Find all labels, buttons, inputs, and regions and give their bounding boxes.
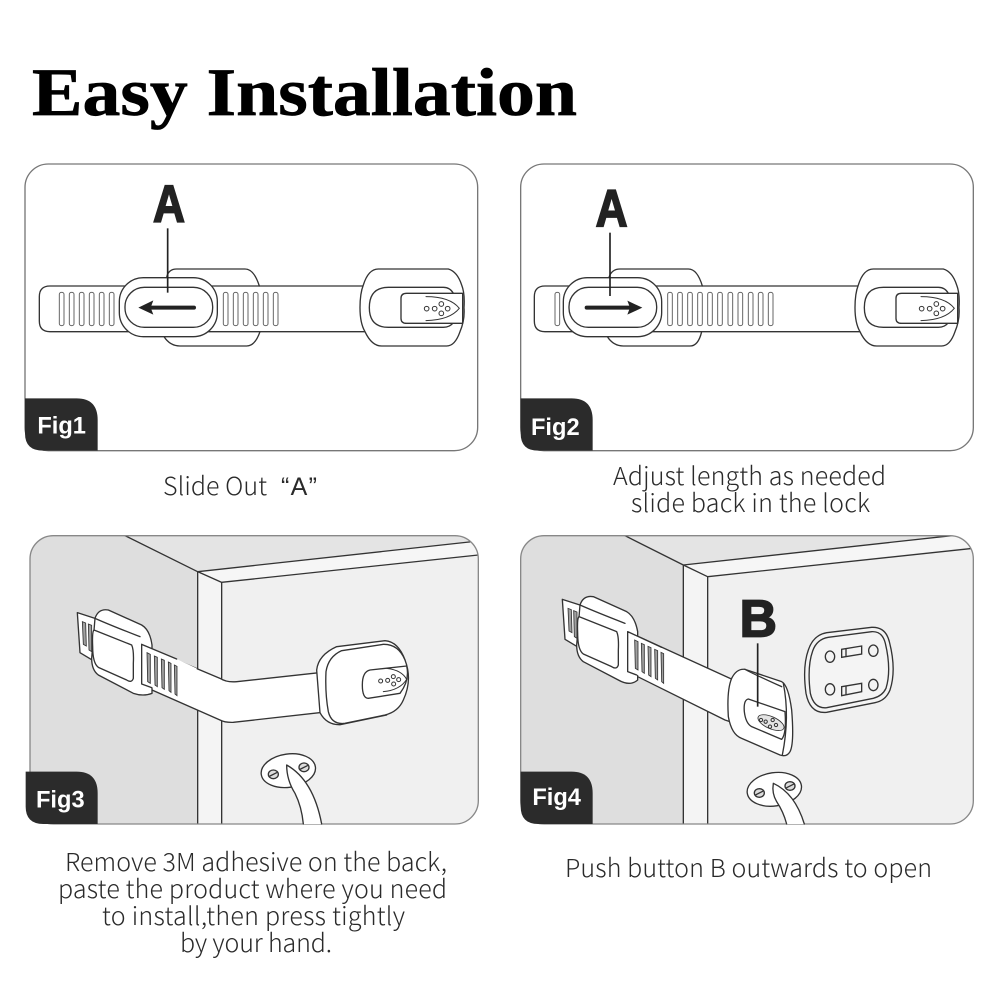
title: Easy Installation xyxy=(32,54,577,130)
strap slots xyxy=(555,292,773,326)
caption: Fig2: slide back in the lock xyxy=(631,484,870,520)
strike plate and strap xyxy=(259,750,322,824)
lock clip xyxy=(728,669,793,756)
panel: Fig2 xyxy=(521,164,973,451)
caption: Fig4: Push button B outwards to open xyxy=(565,849,932,885)
lock clip xyxy=(360,269,464,346)
strap end xyxy=(77,613,100,662)
caption: Fig1: “A” xyxy=(281,473,317,501)
caption: Fig1: Slide Out xyxy=(163,467,267,503)
strap over slider xyxy=(628,632,662,683)
caption: Fig3: to install,then press tightly xyxy=(102,897,405,933)
tag xyxy=(521,398,593,451)
strap xyxy=(534,286,862,332)
label B xyxy=(740,590,777,707)
slider xyxy=(82,610,152,695)
arrow xyxy=(587,302,630,314)
strap xyxy=(39,286,367,332)
slider xyxy=(119,269,260,346)
label B: B xyxy=(740,590,777,648)
lock clip xyxy=(855,269,959,346)
strap slots xyxy=(635,640,664,683)
strap over slider xyxy=(142,644,197,703)
label A xyxy=(596,179,628,296)
arrow xyxy=(152,302,194,314)
label A: A xyxy=(153,175,185,233)
slider xyxy=(568,596,638,683)
label A: A xyxy=(596,179,628,237)
strap xyxy=(141,645,328,722)
tag xyxy=(521,772,593,824)
caption: Fig2: Adjust length as needed xyxy=(613,457,886,493)
tag: Fig3 xyxy=(36,788,85,814)
caption: Fig1 xyxy=(163,467,317,503)
label A xyxy=(153,175,185,293)
caption: Fig3: by your hand. xyxy=(180,924,332,960)
caption: Fig3 xyxy=(58,843,447,960)
strike plate and strap xyxy=(745,769,804,824)
strap slots xyxy=(59,292,278,326)
caption: Fig3: Remove 3M adhesive on the back, xyxy=(65,843,447,879)
mounting plate xyxy=(805,627,893,712)
panel: Fig4 xyxy=(521,536,973,824)
caption: Fig3: paste the product where you need xyxy=(58,870,447,906)
tag: Fig4 xyxy=(532,785,582,811)
strap slots xyxy=(147,653,177,696)
tag: Fig2 xyxy=(531,415,580,441)
caption: Fig2 xyxy=(613,457,886,520)
tag: Fig1 xyxy=(37,413,86,439)
strap end xyxy=(562,599,585,648)
panel: Fig3 xyxy=(26,536,478,824)
tag xyxy=(25,398,98,451)
panel: Fig1 xyxy=(25,164,478,451)
strap xyxy=(628,632,735,723)
tag xyxy=(26,772,98,824)
slider xyxy=(563,269,702,346)
lock clip xyxy=(317,641,408,725)
